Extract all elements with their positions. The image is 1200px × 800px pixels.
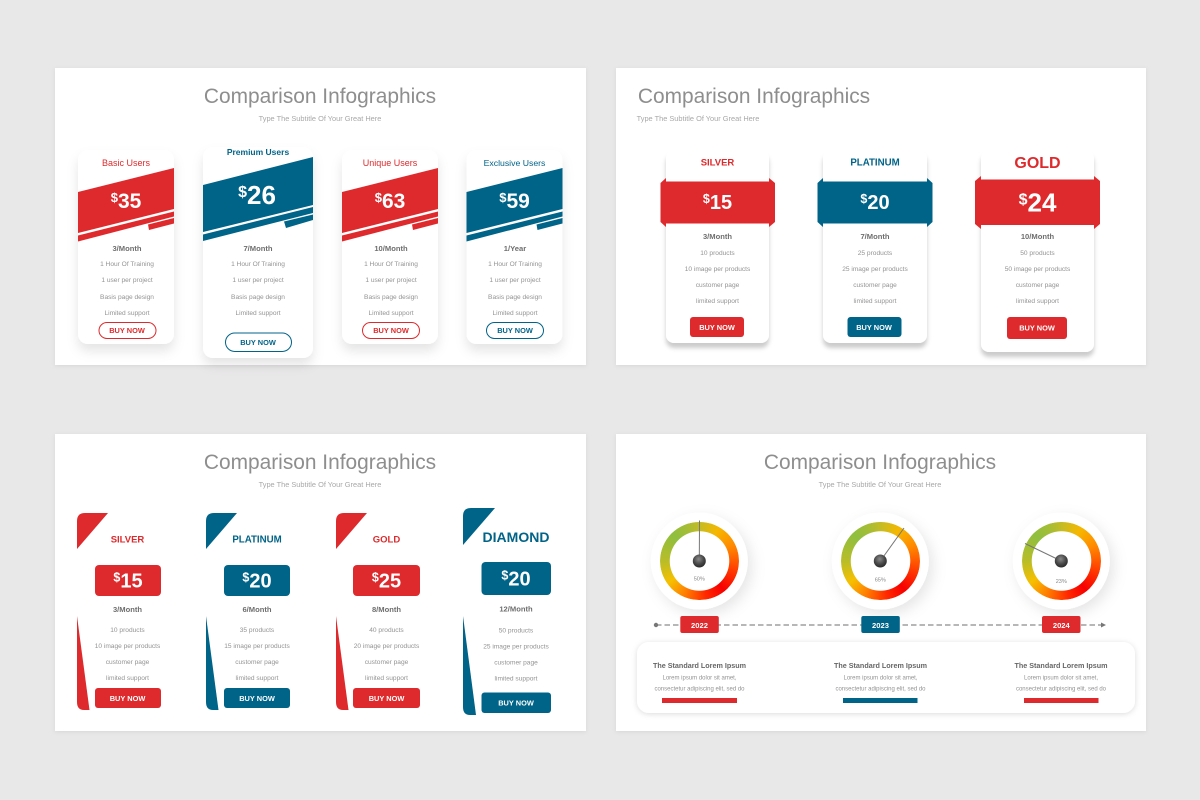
card: Platinum — [818, 150, 932, 343]
column: Diamond — [463, 508, 551, 715]
card: Gold: limited support — [1016, 298, 1059, 305]
card: Platinum: PLATINUM — [850, 158, 900, 168]
column: Silver: 15 — [120, 570, 143, 592]
gauge: 65%: 65% — [875, 578, 886, 584]
card: Silver: 10 image per products — [685, 266, 751, 273]
text block: 2022: Lorem ipsum dolor sit amet, — [662, 676, 737, 682]
column: Silver — [77, 513, 161, 710]
card: Silver: limited support — [696, 298, 739, 305]
card: Unique Users — [342, 150, 438, 344]
column: Gold: $ — [372, 570, 379, 584]
column: Gold — [336, 513, 420, 710]
column: Diamond: $ — [501, 568, 508, 582]
card: Basic Users: BUY NOW — [109, 326, 145, 335]
card: Platinum: 20 — [867, 192, 890, 214]
column: Diamond: 20 — [508, 568, 531, 590]
card: Premium Users: $ — [238, 184, 247, 201]
panel: gauge timeline — [616, 434, 1146, 731]
text block: 2024: consectetur adipiscing elit, sed do — [1016, 686, 1107, 692]
column: Platinum: $ — [242, 570, 249, 584]
gauge: 65% — [832, 512, 929, 610]
year tag: 2023: 2023 — [872, 621, 889, 630]
text block: 2023: consectetur adipiscing elit, sed do — [835, 686, 926, 692]
card: Gold: GOLD — [1014, 155, 1061, 172]
text block: 2022: consectetur adipiscing elit, sed do — [654, 686, 745, 692]
card: Silver: customer page — [696, 282, 740, 289]
text block: 2024: Lorem ipsum dolor sit amet, — [1024, 676, 1098, 682]
card: Premium Users: BUY NOW — [240, 338, 276, 347]
column: Gold: 20 image per products — [354, 643, 420, 650]
card: Silver: 10 products — [700, 250, 735, 257]
card: Premium Users: 1 user per project — [232, 277, 284, 284]
card: Platinum: 25 image per products — [842, 266, 909, 273]
card: Platinum: $ — [860, 192, 867, 206]
card: Basic Users: Limited support — [104, 310, 150, 317]
card: Gold: 50 products — [1020, 250, 1055, 257]
card: Basic Users: 1 user per project — [101, 277, 153, 284]
card: Platinum: BUY NOW — [856, 323, 892, 332]
text block: 2023: Lorem ipsum dolor sit amet, — [843, 676, 918, 682]
column: Silver: 3/Month — [113, 605, 142, 614]
column: Platinum: 6/Month — [242, 605, 272, 614]
card: Basic Users: 35 — [118, 190, 142, 213]
year tag: 2022: 2022 — [691, 621, 708, 630]
card: Exclusive Users: 1 user per project — [489, 277, 541, 284]
panel: corner tab pricing columns — [55, 434, 586, 731]
column: Silver: $ — [113, 570, 120, 584]
card: Premium Users: Limited support — [235, 310, 281, 317]
title: Comparison Infographics — [204, 451, 436, 474]
card: Gold: 50 image per products — [1005, 266, 1071, 273]
card: Basic Users: 1 Hour Of Training — [100, 261, 154, 268]
card: Silver: 15 — [710, 192, 732, 214]
card: Unique Users: $ — [375, 190, 383, 205]
text block: 2023: The Standard Lorem Ipsum — [834, 661, 927, 670]
card: Basic Users — [78, 150, 174, 344]
column: Platinum — [206, 513, 291, 710]
card: Basic Users: $ — [111, 190, 119, 205]
card: Basic Users: Basis page design — [100, 294, 154, 301]
column: Gold: BUY NOW — [369, 694, 404, 703]
year tag: 2024: 2024 — [1053, 621, 1071, 630]
card: Premium Users: 7/Month — [243, 244, 273, 253]
title: Comparison Infographics — [764, 451, 996, 474]
gauge: 23% — [1013, 512, 1110, 610]
column: Diamond: 12/Month — [499, 604, 533, 614]
card: Platinum: customer page — [853, 282, 897, 289]
panel: slanted ribbon pricing cards — [55, 68, 586, 365]
card: Silver: 3/Month — [703, 232, 732, 241]
column: Diamond: BUY NOW — [498, 698, 534, 708]
card: Unique Users: 63 — [382, 190, 405, 213]
card: Premium Users — [203, 147, 313, 358]
card: Unique Users: BUY NOW — [373, 326, 409, 335]
title: Comparison Infographics — [204, 85, 436, 108]
column: Diamond: customer page — [494, 660, 538, 666]
card: Gold: 10/Month — [1021, 232, 1055, 241]
card: Silver: $ — [703, 192, 710, 206]
card: Exclusive Users: BUY NOW — [497, 326, 533, 335]
column: Silver: customer page — [106, 659, 150, 666]
card: Exclusive Users: Basis page design — [488, 294, 542, 301]
column: Silver: BUY NOW — [110, 694, 145, 703]
gauge: 50% — [651, 512, 748, 610]
year tag: 2022 — [680, 616, 719, 633]
column: Platinum: 35 products — [240, 627, 275, 634]
column: Gold: 25 — [379, 570, 401, 592]
card: Unique Users: 1 Hour Of Training — [364, 261, 418, 268]
subtitle: Type The Subtitle Of Your Great Here — [819, 480, 941, 489]
column: Gold: limited support — [365, 675, 408, 682]
card: Unique Users: 10/Month — [374, 244, 408, 253]
subtitle: Type The Subtitle Of Your Great Here — [637, 114, 759, 123]
column: Platinum: 20 — [249, 570, 272, 592]
card: Silver — [660, 150, 775, 343]
column: Diamond: limited support — [495, 676, 538, 682]
text block: 2022: The Standard Lorem Ipsum — [653, 661, 746, 670]
column: Silver: SILVER — [111, 534, 144, 546]
subtitle: Type The Subtitle Of Your Great Here — [259, 114, 381, 123]
card: Gold: customer page — [1016, 282, 1060, 289]
card: Platinum: limited support — [854, 298, 897, 305]
timeline arrow — [654, 622, 1106, 628]
column: Gold: 8/Month — [372, 605, 401, 614]
card: Exclusive Users: Exclusive Users — [484, 158, 546, 168]
column: Platinum: customer page — [235, 659, 279, 666]
column: Platinum: BUY NOW — [239, 694, 275, 703]
text block: 2022 — [653, 661, 746, 703]
column: Silver: 10 products — [110, 627, 145, 634]
lorem ipsum card — [637, 642, 1135, 713]
card: Basic Users: 3/Month — [112, 244, 142, 253]
card: Unique Users: 1 user per project — [365, 277, 417, 284]
card: Exclusive Users: Limited support — [492, 310, 538, 317]
year tag: 2024 — [1042, 616, 1080, 633]
card: Exclusive Users: 1 Hour Of Training — [488, 261, 542, 268]
card: Premium Users: 1 Hour Of Training — [231, 261, 285, 268]
card: Platinum: 7/Month — [860, 232, 890, 241]
column: Gold: 40 products — [369, 627, 404, 634]
card: Exclusive Users — [466, 150, 562, 344]
column: Diamond: 25 image per products — [483, 644, 550, 650]
column: Platinum: limited support — [236, 675, 279, 682]
text block: 2024 — [1014, 661, 1108, 703]
year tag: 2023 — [861, 616, 900, 633]
card: Unique Users: Basis page design — [364, 294, 418, 301]
card: Basic Users: Basic Users — [102, 158, 151, 168]
card: Gold: $ — [1019, 192, 1028, 208]
card: Silver: BUY NOW — [699, 323, 735, 332]
text block: 2023 — [834, 661, 927, 703]
column: Platinum: 15 image per products — [224, 643, 291, 650]
card: Unique Users: Unique Users — [363, 158, 418, 168]
card: Premium Users: Basis page design — [231, 294, 285, 301]
title: Comparison Infographics — [638, 85, 870, 108]
text block: 2024: The Standard Lorem Ipsum — [1014, 661, 1108, 670]
card: Exclusive Users: 59 — [506, 190, 530, 213]
card: Gold: 24 — [1027, 188, 1057, 218]
card: Exclusive Users: 1/Year — [504, 244, 526, 253]
column: Silver: limited support — [106, 675, 149, 682]
column: Diamond: 50 products — [499, 628, 534, 634]
column: Silver: 10 image per products — [95, 643, 161, 650]
card: Gold: BUY NOW — [1019, 324, 1055, 332]
gauge: 50%: 50% — [694, 576, 705, 582]
card: Premium Users: Premium Users — [227, 147, 289, 157]
card: Exclusive Users: $ — [499, 190, 507, 205]
column: Platinum: PLATINUM — [232, 534, 282, 546]
column: Diamond: DIAMOND — [483, 529, 549, 545]
column: Gold: GOLD — [373, 534, 400, 546]
column: Gold: customer page — [365, 659, 409, 666]
subtitle: Type The Subtitle Of Your Great Here — [259, 480, 381, 489]
card: Silver: SILVER — [701, 158, 734, 168]
panel: banded pricing cards — [616, 68, 1146, 365]
card: Platinum: 25 products — [858, 250, 893, 257]
card: Premium Users: 26 — [247, 180, 276, 210]
card: Gold — [975, 150, 1100, 352]
card: Unique Users: Limited support — [368, 310, 414, 317]
gauge: 23%: 23% — [1056, 579, 1067, 585]
